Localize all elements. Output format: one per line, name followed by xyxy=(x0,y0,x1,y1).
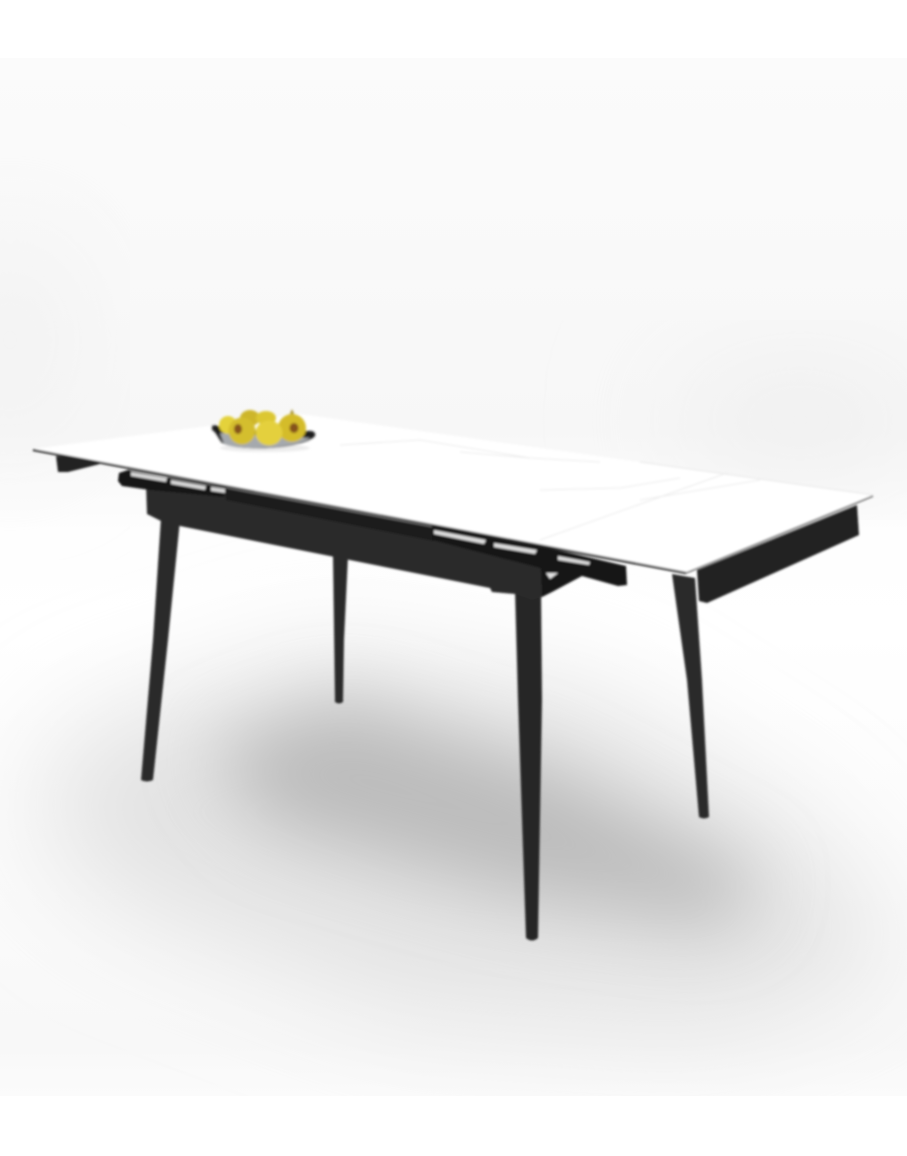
main apron rail xyxy=(146,484,544,600)
runner gap xyxy=(546,573,558,579)
table xyxy=(33,414,873,940)
bowl of quinces xyxy=(212,409,315,452)
runner highlights left xyxy=(131,472,225,493)
center left fruit xyxy=(228,418,256,444)
marble seam and veins xyxy=(340,440,760,540)
right edge line xyxy=(686,496,873,573)
floor shadow xyxy=(30,650,900,1030)
left bracket xyxy=(56,456,100,472)
front edge line xyxy=(33,450,686,573)
front center leg xyxy=(515,590,542,940)
plate shadow xyxy=(220,444,310,452)
marble table top xyxy=(33,414,873,572)
right sliding runner and brace xyxy=(540,546,627,597)
far edge shade xyxy=(640,462,873,495)
plate rim xyxy=(212,425,315,448)
left fruit xyxy=(219,416,237,434)
white top band xyxy=(0,0,907,58)
back leg xyxy=(333,556,348,704)
right fruit xyxy=(278,414,306,442)
right apron xyxy=(697,505,859,603)
center runner xyxy=(432,525,552,570)
front fruit xyxy=(256,420,282,446)
runner highlights center xyxy=(434,530,590,565)
back fruit xyxy=(240,410,260,426)
apron upper dark strip xyxy=(225,488,434,541)
right leg xyxy=(672,574,709,818)
plate body xyxy=(220,433,310,448)
left sliding runner xyxy=(118,470,226,497)
white bottom band xyxy=(0,1096,907,1156)
front left leg xyxy=(141,518,180,782)
